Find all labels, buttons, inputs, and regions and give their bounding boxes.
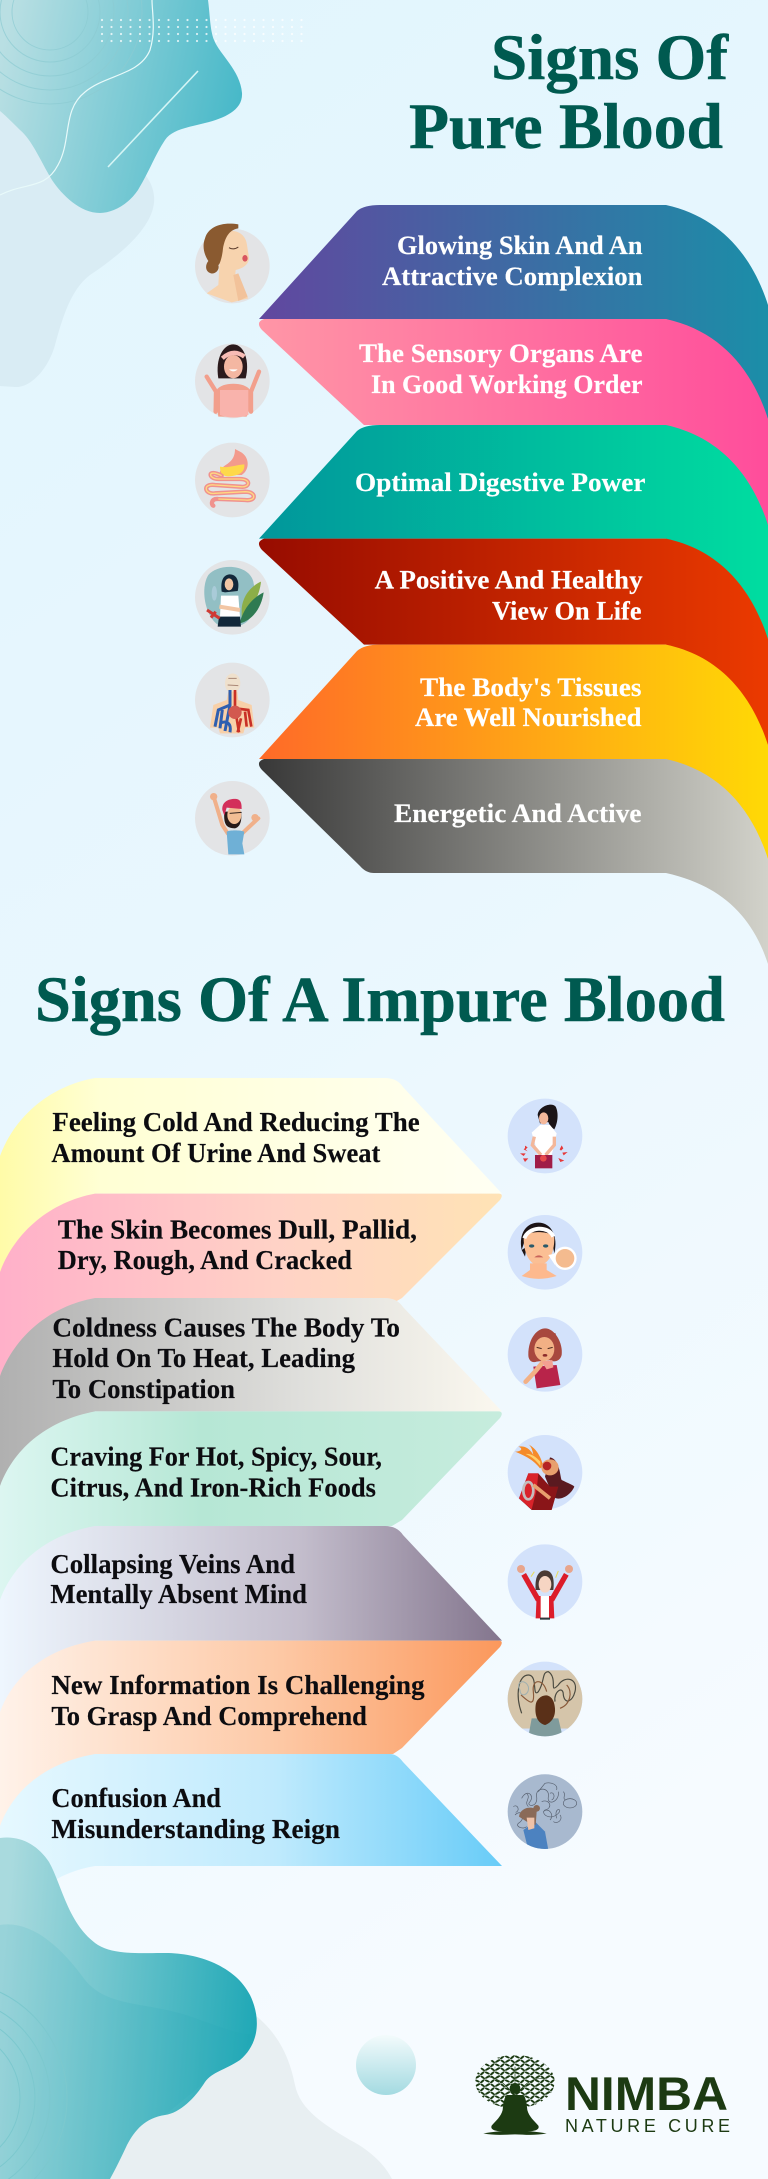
ribbon: glowing skin: Attractive Complexion — [382, 261, 643, 291]
ribbon: new information — [0, 1641, 502, 1826]
ribbon: feeling cold: Feeling Cold And Reducing The — [52, 1107, 420, 1137]
ribbon: constipation: To Constipation — [52, 1374, 235, 1404]
icon: woman with tangled thoughts — [505, 1662, 585, 1739]
icon: circulatory system — [195, 663, 270, 737]
ribbon: nourished tissues — [259, 645, 768, 859]
panel: impure blood ribbons — [0, 1078, 502, 1935]
ribbon: dull skin — [0, 1194, 502, 1376]
ribbon: glowing skin — [259, 205, 768, 419]
icon: tree and meditating figure — [475, 2055, 555, 2135]
ribbon: collapsing veins: Mentally Absent Mind — [50, 1579, 307, 1609]
logo tagline: NATURE CURE — [565, 2116, 730, 2136]
logo wordmark: NIMBA — [565, 2067, 728, 2120]
panel: pure blood ribbons — [259, 205, 768, 964]
ribbon: new information: To Grasp And Comprehend — [51, 1701, 367, 1731]
ribbon: digestive power — [259, 425, 768, 639]
ribbon: cravings: Craving For Hot, Spicy, Sour, — [50, 1442, 382, 1472]
ribbon: cravings: Citrus, And Iron-Rich Foods — [50, 1472, 376, 1502]
ribbon: positive view: View On Life — [492, 596, 642, 626]
ribbon: positive view: A Positive And Healthy — [375, 565, 643, 595]
icon: confused woman — [508, 1774, 582, 1850]
title: Signs Of Pure Blood: Pure Blood — [409, 91, 723, 163]
ribbon: nourished tissues: The Body's Tissues — [420, 672, 642, 702]
icon: woman with dull skin — [508, 1215, 582, 1290]
ribbon: collapsing veins: Collapsing Veins And — [50, 1549, 295, 1579]
ribbon: cravings — [0, 1411, 502, 1600]
logo: Nimba Nature Cure — [475, 2055, 730, 2136]
ribbon: constipation: Coldness Causes The Body To — [52, 1312, 400, 1342]
decorative blob: bottom left — [100, 2015, 392, 2179]
ribbon: energetic: Energetic And Active — [394, 798, 642, 828]
decorative blob: top left — [0, 0, 304, 387]
icon: energetic woman — [195, 781, 270, 856]
icon: woman touching skin — [195, 224, 270, 303]
icon: woman holding throat — [508, 1317, 582, 1392]
title: Signs Of Pure Blood: Signs Of — [491, 22, 729, 94]
ribbon: nourished tissues: Are Well Nourished — [415, 702, 642, 732]
decorative ball — [356, 2035, 416, 2095]
ribbon: dull skin: Dry, Rough, And Cracked — [58, 1245, 352, 1275]
icon: woman with raised arms — [508, 1544, 582, 1620]
icon: healthy woman with plants — [195, 560, 270, 635]
ribbon: confusion — [0, 1754, 502, 1935]
ribbon: energetic — [259, 759, 768, 964]
ribbon: feeling cold — [0, 1078, 502, 1272]
ribbon: positive view — [259, 539, 768, 745]
ribbon: constipation: Hold On To Heat, Leading — [52, 1343, 355, 1373]
decorative blob: bottom teal — [0, 1837, 258, 2179]
icon: woman with headband — [195, 344, 270, 418]
ribbon: collapsing veins — [0, 1526, 502, 1712]
ribbon: constipation — [0, 1298, 502, 1486]
ribbon: confusion: Misunderstanding Reign — [51, 1814, 340, 1844]
icon: digestive system — [195, 443, 270, 517]
ribbon: sensory organs: The Sensory Organs Are — [359, 338, 643, 368]
ribbon: glowing skin: Glowing Skin And An — [397, 230, 643, 260]
icon: woman breathing fire — [508, 1435, 582, 1510]
ribbon: sensory organs: In Good Working Order — [371, 369, 643, 399]
ribbon: new information: New Information Is Challenging — [51, 1670, 425, 1700]
ribbon: confusion: Confusion And — [51, 1783, 221, 1813]
ribbon: digestive power: Optimal Digestive Power — [355, 467, 646, 497]
ribbon: sensory organs — [259, 319, 768, 525]
title: Signs Of A Impure Blood: Signs Of A Impure Blood — [35, 964, 725, 1036]
icon: woman holding bladder — [508, 1099, 582, 1173]
ribbon: feeling cold: Amount Of Urine And Sweat — [51, 1138, 380, 1168]
ribbon: dull skin: The Skin Becomes Dull, Pallid, — [58, 1215, 417, 1245]
title: Signs Of Pure Blood — [409, 22, 729, 163]
